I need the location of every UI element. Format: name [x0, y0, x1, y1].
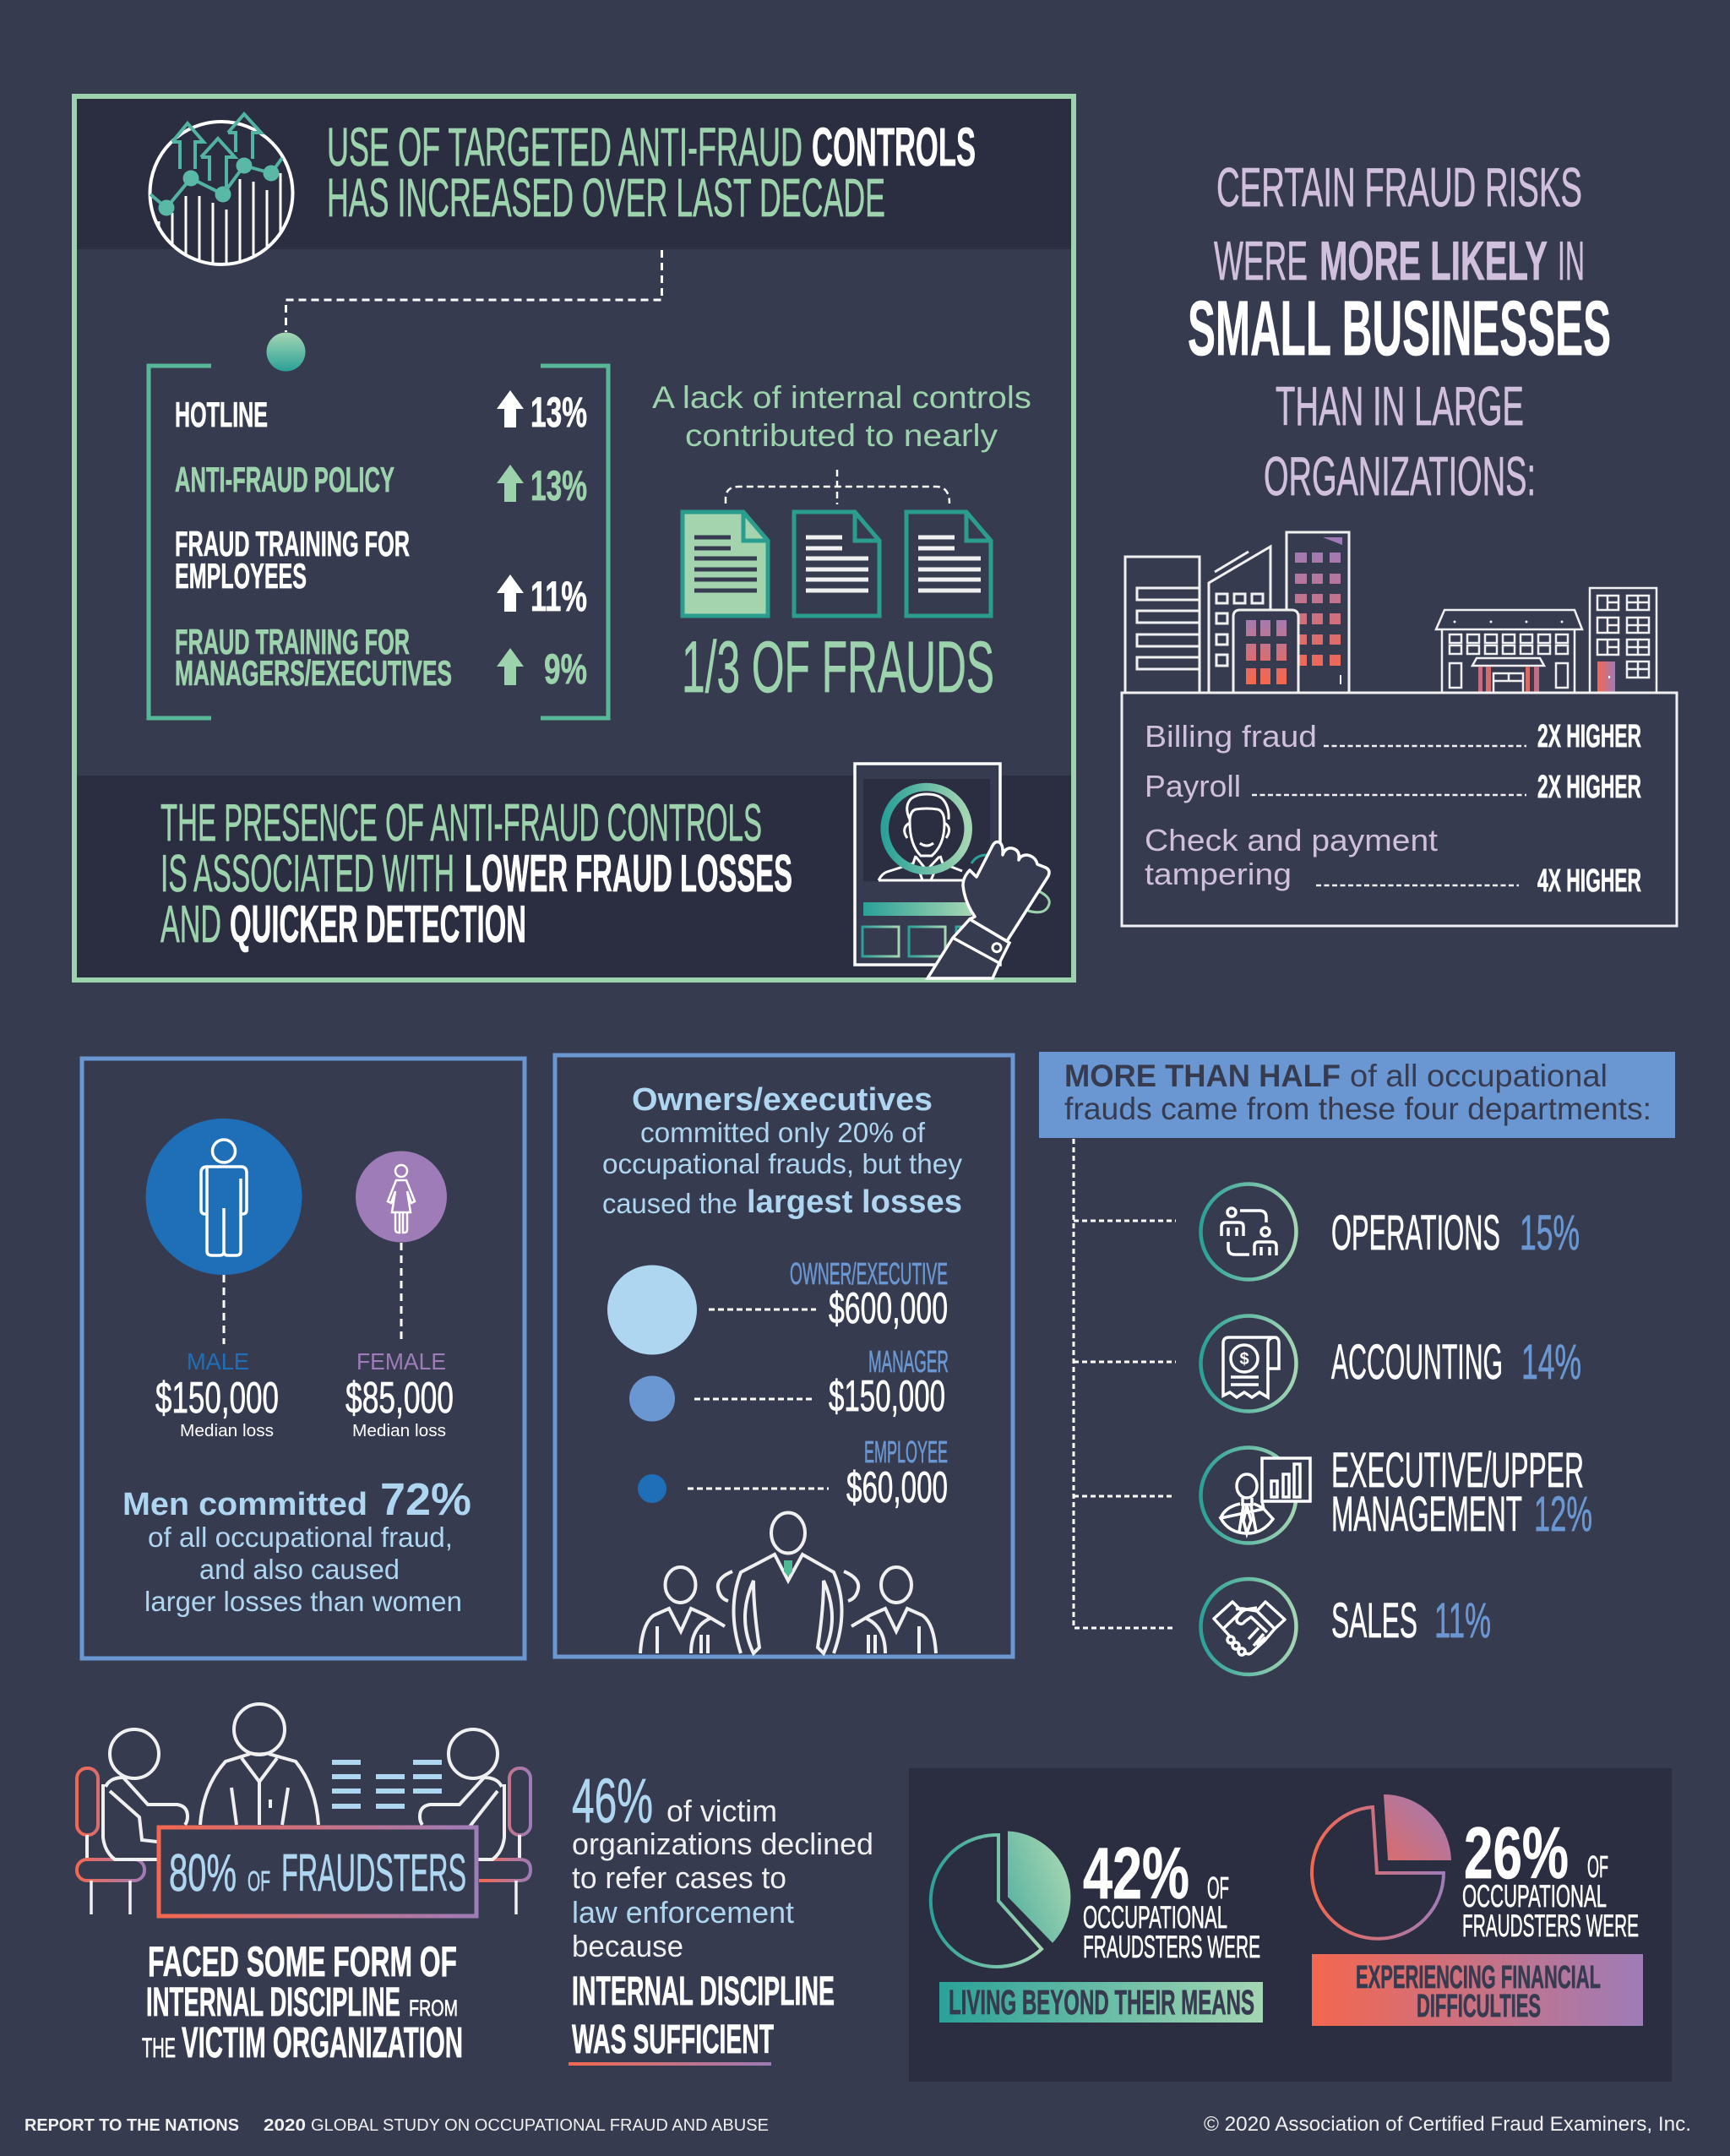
illustration: meeting table [77, 1704, 530, 1916]
text: men committed 72%: 72% [380, 1474, 471, 1525]
chart: 26% pie [1312, 1794, 1451, 1939]
list: controls increases: 11% [530, 573, 587, 620]
list: controls increases: 9% [544, 645, 587, 693]
banner: more than half [1039, 1052, 1675, 1138]
icon: receipt [1223, 1337, 1279, 1397]
text: 46% declined to refer: organizations declined [572, 1827, 873, 1861]
row: check tampering: tampering [1145, 857, 1292, 891]
row: payroll [1145, 769, 1641, 805]
row: billing fraud [1145, 719, 1641, 754]
panel: fraudster red flags [909, 1768, 1672, 2082]
list: controls increases [175, 389, 587, 693]
building: tall tower [1287, 532, 1349, 693]
text: lack of internal controls: A lack of internal controls [652, 380, 1031, 415]
list: controls increases: ANTI-FRAUD POLICY [175, 460, 394, 499]
row: payroll: 2X HIGHER [1537, 770, 1641, 805]
bracket over documents [726, 470, 949, 504]
text: 46% declined to refer: 46% [572, 1766, 653, 1836]
building: front block [1233, 610, 1298, 693]
text: 46% declined to refer: to refer cases to [572, 1860, 786, 1895]
table label: 80% of fraudsters: FRAUDSTERS [281, 1844, 466, 1903]
stat: male median loss: Median loss [180, 1422, 274, 1440]
label: living beyond their means: LIVING BEYOND THEIR MEANS [949, 1983, 1254, 2022]
department: accounting: 14% [1521, 1335, 1581, 1390]
stat: 26% financial difficulties: 26% [1464, 1813, 1569, 1894]
footer: copyright: © 2020 Association of Certified Fraud Examiners, Inc. [1204, 2113, 1691, 2136]
footer: report title [24, 2116, 769, 2135]
department: sales: 11% [1434, 1593, 1491, 1648]
circle: female [356, 1151, 447, 1242]
department: operations [1201, 1184, 1580, 1279]
text: presence of controls: THE PRESENCE OF ANTI-FRAUD CONTROLS [160, 794, 762, 852]
text: presence of controls: IS ASSOCIATED WITH [160, 845, 454, 903]
right chair [479, 1768, 530, 1914]
underline [569, 2062, 771, 2066]
banner: more than half: of all occupational [1350, 1059, 1608, 1093]
text: faced internal discipline: FACED SOME FORM OF [148, 1938, 457, 1985]
row: payroll: Payroll [1145, 769, 1241, 803]
list: controls increases: FRAUD TRAINING FOR [175, 622, 410, 662]
icon: light blue speech dashes [332, 1760, 442, 1809]
department: operations: 15% [1520, 1206, 1580, 1260]
panel: certain fraud risks heading: MORE LIKELY [1319, 230, 1548, 291]
icon: executive with chart [1221, 1458, 1310, 1533]
heading: anti-fraud controls: HAS INCREASED OVER LAST DECADE [327, 167, 885, 228]
row: check tampering: 4X HIGHER [1537, 863, 1641, 899]
heading: anti-fraud controls [327, 117, 976, 228]
department: executive/upper management [1201, 1443, 1592, 1543]
icon: operations people [1221, 1208, 1276, 1255]
chart: 42% pie [931, 1832, 1070, 1967]
connector ball [267, 333, 306, 372]
text: 46% declined to refer: because [572, 1929, 683, 1963]
text: owners/executives [602, 1082, 962, 1220]
banner: more than half: MORE THAN HALF [1064, 1059, 1341, 1093]
list: controls increases: MANAGERS/EXECUTIVES [175, 653, 452, 693]
department: accounting [1201, 1316, 1581, 1411]
footer: report title: 2020 [264, 2116, 306, 2135]
list: controls increases: 13% [530, 462, 587, 509]
icon: female figure [388, 1165, 415, 1233]
person: right [420, 1729, 504, 1859]
stat: female median loss: $85,000 [345, 1374, 454, 1423]
text: faced internal discipline: FROM [409, 1995, 458, 2021]
bubble row: manager [629, 1344, 949, 1421]
dashed connector [286, 250, 662, 332]
building: slanted roof [1209, 547, 1270, 693]
text: presence of controls [160, 794, 792, 954]
stat: one third of frauds: 1/3 OF FRAUDS [682, 627, 994, 708]
table label: 80% of fraudsters: OF [248, 1865, 270, 1897]
list: controls increases: 13% [530, 389, 587, 436]
text: owners/executives: occupational frauds, but they [602, 1148, 962, 1179]
department: sales: SALES [1331, 1593, 1417, 1648]
person: centre [200, 1704, 318, 1825]
text: 46% declined to refer: of victim [666, 1794, 777, 1828]
bubble row: employee: $60,000 [846, 1463, 948, 1512]
text: lack of internal controls [652, 380, 1031, 453]
panel: certain fraud risks heading: WERE [1214, 230, 1308, 291]
footer: report title: REPORT TO THE NATIONS [24, 2116, 239, 2135]
icon: handshake [1214, 1602, 1285, 1655]
illustration: city buildings [1125, 532, 1657, 693]
building: apartments [1590, 588, 1657, 693]
panel border [74, 96, 1074, 980]
text: faced internal discipline: INTERNAL DISCIPLINE [146, 1980, 400, 2025]
heading: anti-fraud controls: CONTROLS [812, 117, 976, 177]
row: billing fraud: Billing fraud [1145, 719, 1317, 754]
text: lack of internal controls: contributed to nearly [685, 418, 998, 453]
stat: female median loss: Median loss [352, 1422, 446, 1440]
stat: 42% living beyond means: 42% [1083, 1833, 1189, 1914]
stat: 42% living beyond means [1083, 1833, 1260, 1964]
text: owners/executives: largest losses [747, 1184, 962, 1220]
text: owners/executives: Owners/executives [632, 1082, 933, 1118]
department: executive/upper management: MANAGEMENT [1331, 1487, 1522, 1542]
text: presence of controls: LOWER FRAUD LOSSES [465, 845, 792, 903]
list: controls increases: EMPLOYEES [175, 556, 307, 596]
bubble row: manager: MANAGER [868, 1344, 949, 1379]
building: office block [1125, 557, 1200, 693]
panel: anti-fraud controls [74, 96, 1074, 980]
bubble row: owner/executive: $600,000 [829, 1284, 948, 1333]
text: 46% declined to refer: INTERNAL DISCIPLINE [572, 1969, 835, 2014]
department: sales [1201, 1579, 1491, 1674]
stat: 26% financial difficulties: OF [1587, 1849, 1608, 1884]
building: school [1436, 610, 1582, 693]
text: faced internal discipline [142, 1938, 463, 2066]
banner: more than half: frauds came from these four departments: [1064, 1092, 1651, 1126]
text: owners/executives: caused the [602, 1188, 737, 1219]
label: experiencing financial difficulties: DIFFICULTIES [1417, 1989, 1541, 2024]
list: controls increases: HOTLINE [175, 395, 268, 434]
label: experiencing financial difficulties [1312, 1954, 1643, 2026]
table label: 80% of fraudsters: 80% [169, 1844, 237, 1903]
bubble row: owner/executive: OWNER/EXECUTIVE [790, 1256, 948, 1291]
stat: 26% financial difficulties [1462, 1813, 1639, 1943]
icon: group of executives [640, 1512, 936, 1653]
table label: 80% of fraudsters [159, 1827, 476, 1916]
text: owners/executives: committed only 20% of [640, 1117, 926, 1148]
stat: female median loss: FEMALE [356, 1348, 446, 1375]
text: men committed 72% [122, 1474, 471, 1617]
icon: rising chart [150, 114, 292, 270]
stat: 42% living beyond means: OCCUPATIONAL [1083, 1900, 1227, 1935]
dashed drop lines [224, 1243, 401, 1344]
left chair [77, 1768, 144, 1914]
text: faced internal discipline: VICTIM ORGANIZATION [182, 2018, 463, 2066]
dashed tree connector [1074, 1139, 1176, 1628]
person: left [103, 1729, 188, 1859]
panel: owners and executives [555, 1055, 1013, 1657]
header band [74, 96, 1074, 249]
row: check tampering [1145, 823, 1641, 899]
panel: certain fraud risks heading [1188, 156, 1611, 507]
footer: report title: GLOBAL STUDY ON OCCUPATIONAL FRAUD AND ABUSE [311, 2116, 769, 2135]
stat: 26% financial difficulties: OCCUPATIONAL [1462, 1879, 1607, 1914]
panel: small business comparison [1122, 693, 1677, 926]
panel: certain fraud risks heading: IN [1558, 230, 1585, 291]
label: living beyond their means [939, 1982, 1263, 2023]
heading: anti-fraud controls: USE OF TARGETED ANTI-FRAUD [327, 117, 802, 177]
department: accounting: ACCOUNTING [1331, 1335, 1503, 1390]
text: 46% declined to refer [569, 1766, 873, 2066]
bubble row: employee [638, 1435, 948, 1512]
icon: receipt: $ [1239, 1350, 1249, 1369]
panel: certain fraud risks heading: THAN IN LARGE [1276, 375, 1524, 437]
text: presence of controls: AND [160, 896, 221, 954]
department: executive/upper management: 12% [1534, 1487, 1592, 1542]
text: men committed 72%: Men committed [122, 1487, 367, 1522]
text: 46% declined to refer: WAS SUFFICIENT [572, 2017, 774, 2062]
text: faced internal discipline: THE [142, 2033, 176, 2063]
panel: certain fraud risks heading: ORGANIZATIONS: [1264, 445, 1536, 507]
text: men committed 72%: and also caused [199, 1554, 400, 1585]
panel: male vs female [82, 1059, 525, 1658]
bubble row: owner/executive [607, 1256, 948, 1355]
stat: male median loss: MALE [187, 1348, 249, 1375]
list: controls increases: FRAUD TRAINING FOR [175, 524, 410, 564]
stat: female median loss [345, 1348, 454, 1440]
icon: male figure [201, 1140, 247, 1255]
panel: owners and executives: EMPLOYEE [864, 1435, 948, 1469]
footer band [74, 776, 1074, 980]
text: presence of controls: QUICKER DETECTION [230, 896, 526, 954]
text: 46% declined to refer: law enforcement [572, 1895, 794, 1930]
stat: 42% living beyond means: OF [1207, 1870, 1229, 1905]
stat: 42% living beyond means: FRAUDSTERS WERE [1083, 1930, 1260, 1964]
icon: profile under magnifier [855, 764, 1049, 978]
icon: three documents [683, 512, 991, 616]
stat: male median loss [155, 1348, 279, 1440]
text: men committed 72%: larger losses than women [144, 1586, 462, 1617]
bubble row: manager: $150,000 [829, 1372, 945, 1421]
row: billing fraud: 2X HIGHER [1537, 719, 1641, 754]
circle: male [145, 1119, 302, 1275]
text: men committed 72%: of all occupational fraud, [148, 1522, 453, 1553]
stat: male median loss: $150,000 [155, 1374, 279, 1423]
control list bracket [149, 366, 608, 718]
department: operations: OPERATIONS [1331, 1206, 1500, 1260]
row: check tampering: Check and payment [1145, 823, 1438, 858]
